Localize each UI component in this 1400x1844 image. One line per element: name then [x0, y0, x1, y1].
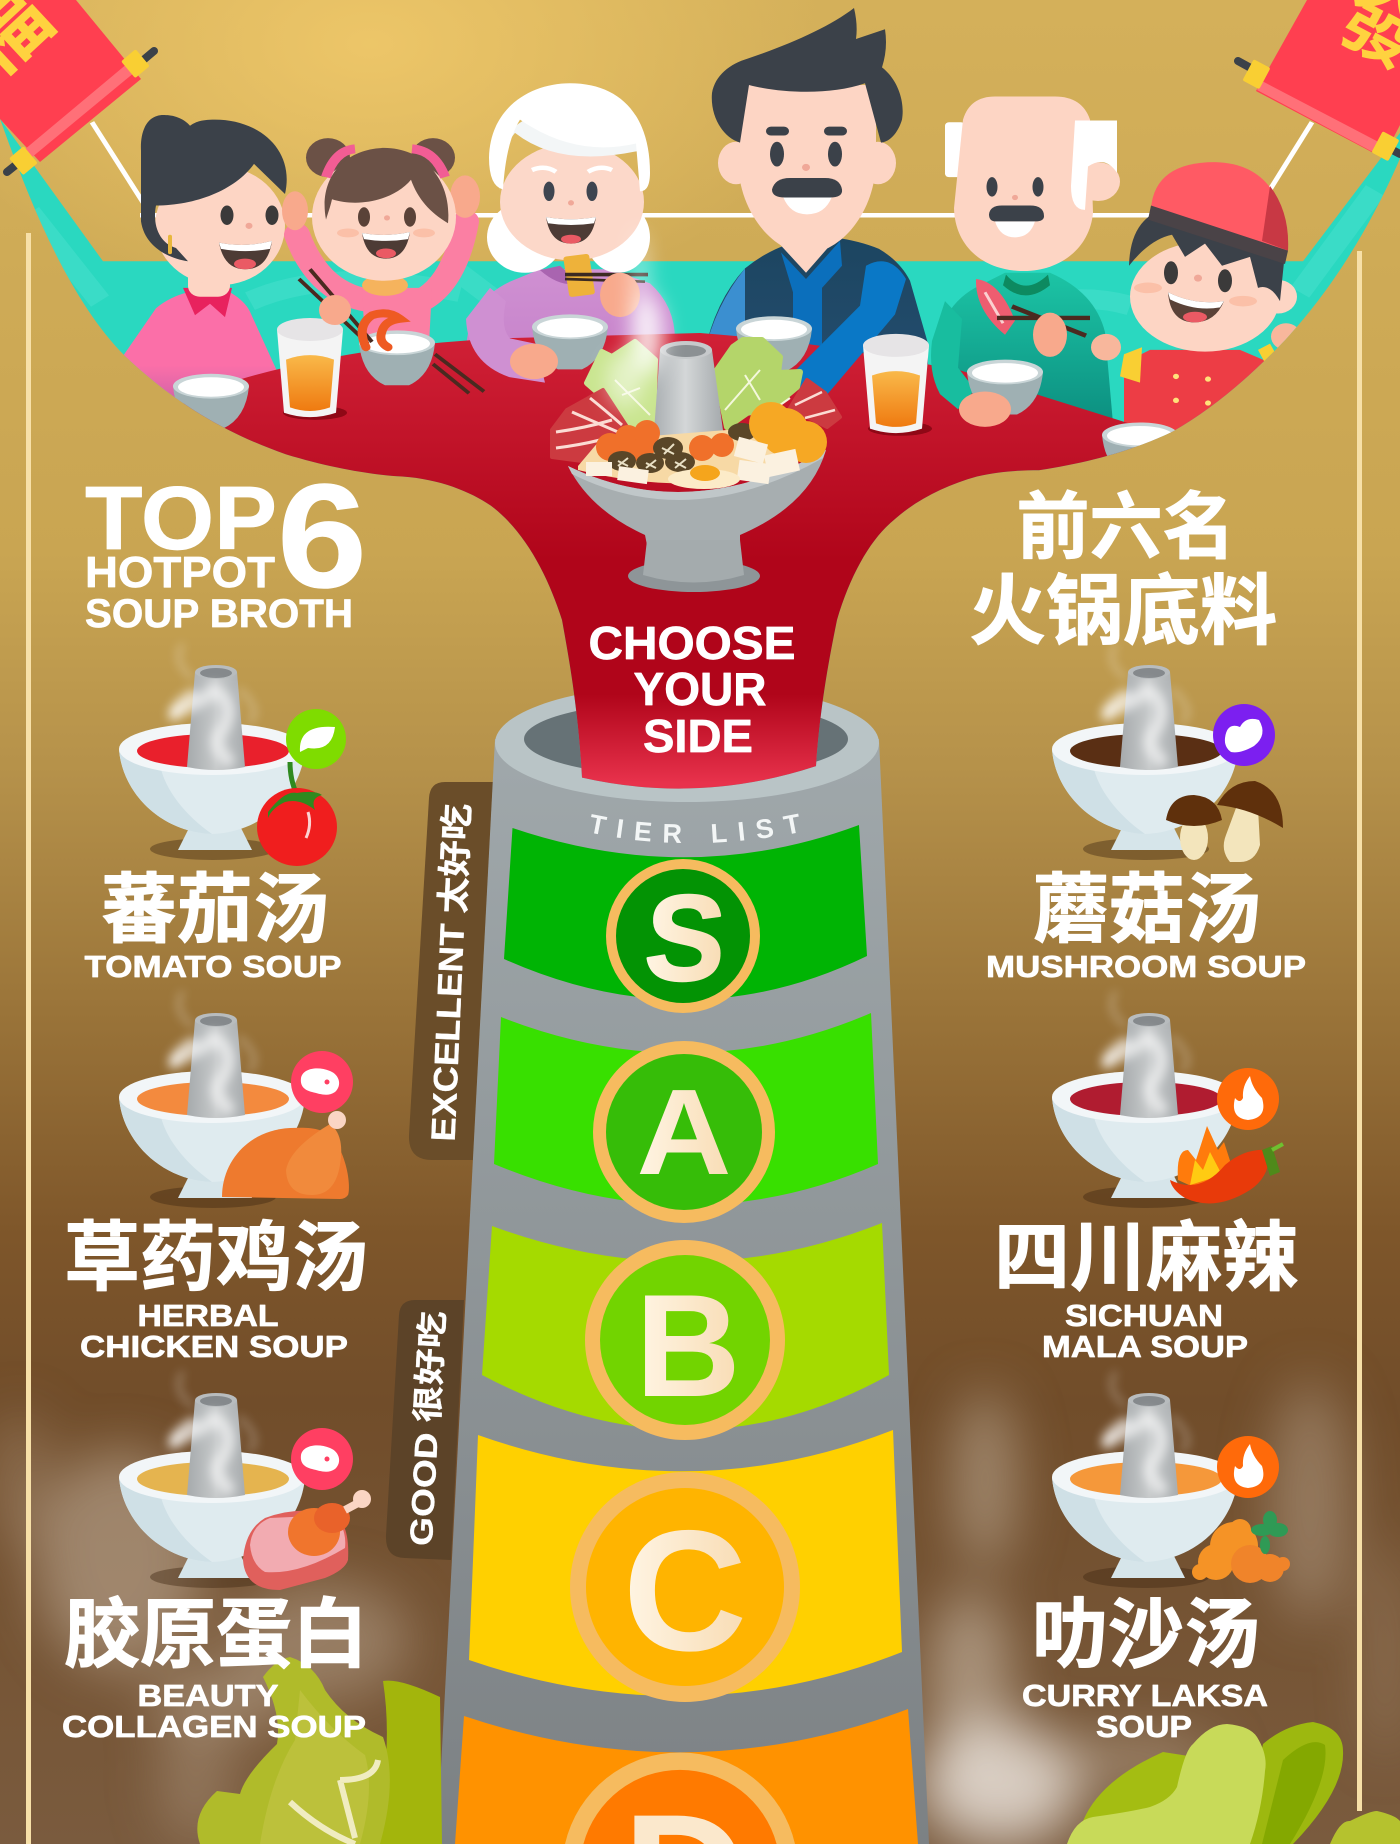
soup: beauty collagen — [62, 1373, 371, 1744]
lettuce right — [1067, 1722, 1400, 1844]
white stage lines — [92, 122, 1312, 215]
tag: excellent: EXCELLENT 太好吃 — [425, 803, 477, 1142]
tower inner opening — [524, 701, 848, 777]
person: father — [709, 8, 928, 364]
left glass shadow — [283, 408, 347, 420]
soup: sichuan mala: SICHUAN — [1065, 1298, 1223, 1333]
choose your side: CHOOSE — [588, 617, 796, 669]
band C — [469, 1430, 902, 1696]
person: boy — [1091, 162, 1301, 434]
bottom smoke — [0, 1380, 1400, 1844]
pot egg — [668, 465, 740, 489]
title english: TOP — [85, 469, 277, 569]
tag: good: GOOD 很好吃 — [403, 1310, 451, 1547]
tier tower — [441, 695, 929, 1844]
soup: sichuan mala: MALA SOUP — [1042, 1329, 1248, 1364]
left juice glass — [277, 318, 343, 417]
soup: tomato: TOMATO SOUP — [84, 949, 342, 984]
top family scene — [0, 8, 1400, 789]
soup: curry laksa — [1022, 1373, 1290, 1744]
pot balls and mushrooms — [596, 420, 756, 473]
title chinese: 火锅底料 — [969, 569, 1277, 655]
spice paste — [1192, 1511, 1290, 1583]
person: grandfather — [932, 97, 1120, 423]
title english — [85, 454, 367, 636]
red banner left — [0, 0, 154, 175]
soup: herbal chicken — [64, 993, 368, 1364]
band A — [494, 1013, 878, 1205]
title chinese — [969, 487, 1277, 655]
title english: HOTPOT — [85, 548, 275, 597]
pot steam — [607, 230, 664, 408]
father's sleeve on table — [796, 261, 906, 394]
pot foot — [628, 540, 760, 592]
badge: flame — [1217, 1436, 1279, 1498]
ham and drumstick — [243, 1490, 371, 1590]
right glass shadow — [868, 424, 932, 436]
soup: herbal chicken: HERBAL — [138, 1298, 278, 1333]
person: grandmother — [466, 83, 675, 340]
person: girl — [282, 138, 480, 336]
choose your side — [588, 617, 796, 762]
badge: bean — [1213, 704, 1275, 766]
soup: sichuan mala — [994, 993, 1298, 1364]
grandfather's sleeve on table — [931, 301, 975, 409]
red banner right — [1238, 0, 1400, 161]
person: mother — [123, 115, 287, 425]
choose your side: SIDE — [643, 710, 753, 762]
tier list heading: TIER LIST — [591, 814, 799, 843]
pot bowl — [568, 450, 826, 545]
soup: curry laksa: CURRY LAKSA — [1022, 1678, 1268, 1713]
right juice glass — [863, 334, 929, 433]
title chinese: 前六名 — [1016, 487, 1236, 568]
soup: beauty collagen: BEAUTY — [138, 1678, 279, 1713]
tier D badge — [565, 1752, 795, 1844]
roast chicken — [222, 1111, 349, 1199]
pot chimney — [653, 341, 725, 452]
label: sichuan mala soup: 四川麻辣 — [994, 1216, 1298, 1301]
lettuce left — [197, 1657, 442, 1844]
centre hotpot — [552, 230, 840, 592]
tier S badge: S — [641, 869, 730, 1006]
label: herbal chicken soup: 草药鸡汤 — [64, 1216, 368, 1301]
teal banquet backdrop — [0, 119, 1400, 797]
tower rim — [495, 684, 879, 802]
tier B badge — [585, 1240, 785, 1440]
soup: tomato — [84, 645, 346, 984]
tag: good — [386, 1300, 464, 1560]
band D — [455, 1709, 918, 1844]
tag: excellent — [409, 782, 493, 1160]
label: beauty collagen soup: 胶原蛋白 — [64, 1593, 368, 1678]
tier C badge — [570, 1472, 800, 1702]
pot soup — [578, 425, 824, 483]
badge: flame — [1217, 1068, 1279, 1130]
badge: meat — [291, 1051, 353, 1113]
rice bowls — [173, 314, 1178, 477]
tier B badge: B — [635, 1264, 741, 1427]
title english: 6 — [277, 454, 367, 619]
badge: leaf — [286, 709, 346, 769]
girl's chopsticks and shrimp — [299, 269, 400, 347]
tier A badge — [593, 1041, 775, 1223]
choose your side: YOUR — [634, 663, 766, 715]
chopsticks on table — [433, 354, 484, 393]
badge: meat — [291, 1428, 353, 1490]
tier C badge: C — [623, 1495, 747, 1687]
band B — [482, 1223, 889, 1430]
grandmother's sleeve on table — [466, 288, 545, 383]
soup: curry laksa: SOUP — [1096, 1709, 1192, 1744]
title english: SOUP BROTH — [85, 592, 353, 636]
soup: mushroom — [986, 645, 1306, 984]
tomato — [257, 762, 337, 866]
soup: beauty collagen: COLLAGEN SOUP — [62, 1709, 366, 1744]
pot lettuce — [587, 340, 800, 430]
tier S badge — [606, 859, 760, 1013]
chili and fire — [1170, 1126, 1283, 1203]
mushrooms — [1166, 781, 1283, 862]
tier A badge: A — [636, 1064, 732, 1200]
pot meat — [552, 380, 840, 463]
label: curry laksa soup: 叻沙汤 — [1032, 1593, 1260, 1678]
soup: herbal chicken: CHICKEN SOUP — [80, 1329, 348, 1364]
soup: mushroom: MUSHROOM SOUP — [986, 949, 1306, 984]
label: mushroom soup: 蘑菇汤 — [1033, 868, 1261, 953]
label: tomato soup: 蕃茄汤 — [101, 868, 329, 953]
red table and trunk — [184, 333, 1160, 789]
band S — [504, 825, 867, 1000]
pot tofu — [586, 437, 800, 484]
pot fishcakes — [749, 402, 827, 463]
hands on bowls — [510, 344, 1011, 427]
